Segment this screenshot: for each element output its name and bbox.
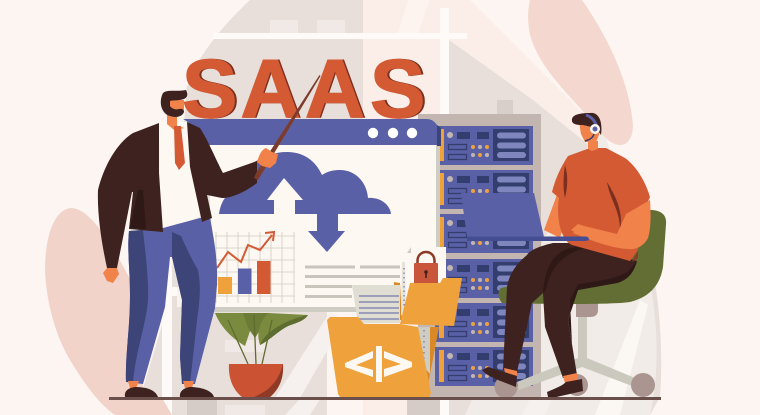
browser window [183, 119, 441, 312]
right hand [257, 148, 278, 168]
folder with documents [327, 247, 462, 397]
icon: cloud with upload and download arrows [219, 152, 391, 252]
seated man [461, 113, 651, 398]
shoes [504, 368, 578, 383]
shoes [128, 381, 194, 388]
face [579, 122, 599, 142]
neck [588, 141, 598, 151]
floor line [109, 397, 661, 400]
folder flap [400, 278, 462, 326]
trousers [503, 243, 637, 378]
heading: SAAS: SAAS [182, 42, 425, 135]
paper strip [401, 262, 406, 315]
headset [585, 115, 600, 141]
chair legs [517, 313, 635, 390]
background: pink blob left [45, 208, 172, 415]
hair [572, 113, 601, 135]
left hand [103, 268, 119, 283]
tie [174, 126, 185, 170]
shirt [159, 122, 200, 227]
left arm [544, 192, 570, 238]
jacket [98, 123, 163, 268]
heading: SAAS: SAAS [184, 42, 427, 135]
window dots [368, 128, 417, 138]
leaves [215, 313, 252, 346]
chair hub [576, 303, 598, 317]
server rack [418, 114, 541, 397]
padlock [414, 252, 438, 284]
right arm [573, 200, 651, 249]
folder front [327, 317, 431, 397]
hand [571, 224, 594, 236]
strip below [417, 327, 430, 374]
chair seat and back [498, 210, 666, 304]
bar chart [215, 232, 295, 303]
neck and head [167, 115, 185, 130]
shirt [552, 148, 650, 261]
pot [229, 364, 283, 397]
chair wheels [494, 373, 655, 398]
laptop [461, 193, 589, 241]
folder back [394, 282, 439, 385]
chair [494, 210, 666, 398]
background: city silhouette [140, 0, 661, 415]
pointer [254, 75, 320, 180]
window body [210, 145, 436, 312]
background: pink blob right [528, 0, 633, 145]
document stack [352, 285, 400, 323]
trousers [126, 217, 217, 384]
icon: code symbol [345, 346, 412, 382]
man presenting [98, 75, 320, 397]
text lines [305, 266, 400, 298]
back document [403, 247, 446, 285]
window title bar [183, 119, 437, 145]
plant [215, 313, 308, 397]
